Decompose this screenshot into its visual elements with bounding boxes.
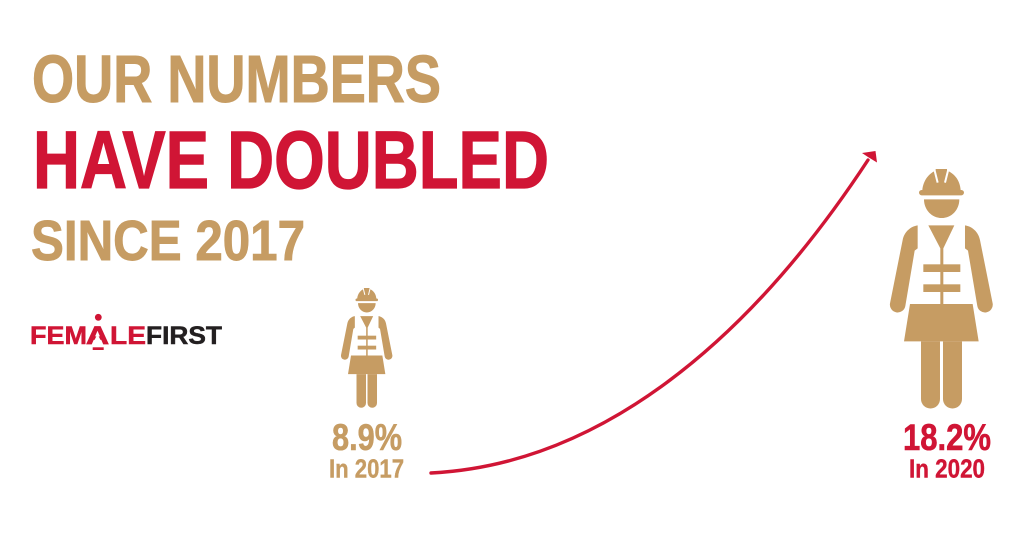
logo: Female First: A: [86, 322, 109, 350]
icon: large worker 2020: [890, 169, 993, 408]
label: in 2020: In 2020: [909, 454, 985, 484]
stat: 8.9%: 8.9%: [332, 417, 402, 458]
logo: Female First: [30, 314, 222, 350]
title line: our numbers: OUR NUMBERS: [32, 42, 441, 117]
stat: 18.2%: 18.2%: [903, 417, 991, 458]
title line: since 2017: SINCE 2017: [31, 209, 305, 273]
arrow: growth curve: [431, 151, 877, 473]
icon: small worker 2017: [341, 288, 392, 408]
title line: have doubled: HAVE DOUBLED: [33, 115, 549, 206]
logo: Female First: LE: [110, 322, 146, 350]
logo: Female First: FIRST: [146, 322, 222, 350]
label: in 2017: In 2017: [329, 454, 404, 484]
logo: Female First: FEM: [30, 322, 87, 350]
